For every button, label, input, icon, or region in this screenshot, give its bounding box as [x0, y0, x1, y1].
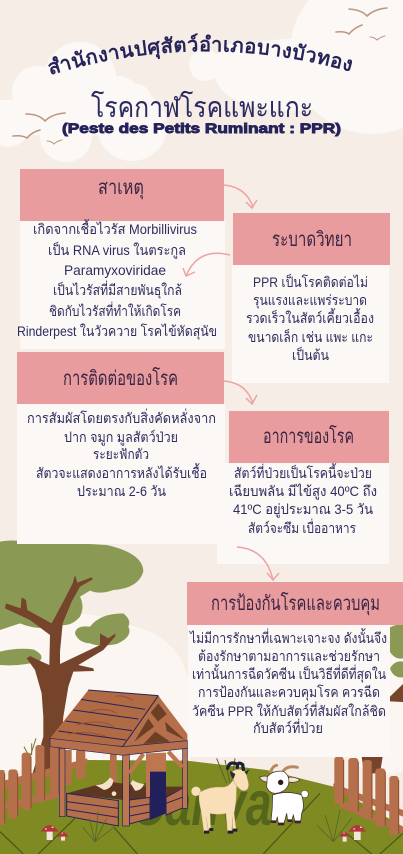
subtitle: (Peste des Petits Ruminant : PPR): [62, 120, 341, 136]
prevention text: ต้องรักษาตามอาการและช่วยรักษา: [198, 648, 380, 664]
prevention header: [187, 582, 403, 625]
white goat: horns: [271, 765, 297, 772]
symptoms body: [217, 463, 389, 564]
mushrooms: right: [339, 825, 366, 842]
tree: trunk and branches: [5, 575, 116, 777]
causes text: ชิดกับไวรัสที่ทำให้เกิดโรค: [49, 302, 181, 319]
tan goat: hooves: [204, 828, 237, 834]
epidemiology body: [232, 265, 389, 383]
panel: prevention and control: [187, 582, 403, 757]
epidemiology text: ขนาดเล็ก เช่น แพะ แกะ: [248, 328, 373, 345]
tuft behind goats: [217, 758, 235, 783]
symptoms text: 41ºC อยู่ประมาณ 3-5 วัน: [233, 501, 373, 518]
ground: [0, 760, 403, 854]
barn: rear fence pickets: [52, 748, 117, 795]
arrow: epidemiology to transmission: [183, 253, 230, 276]
prevention body: [188, 625, 390, 757]
birds: left: [13, 113, 65, 144]
cloud: upper right: [189, 0, 403, 134]
fence: left: [0, 738, 87, 825]
prevention text: การป้องกันและควบคุมโรค ควรฉีด: [198, 684, 380, 701]
panel: symptoms: [217, 411, 389, 564]
epidemiology header: [233, 213, 390, 265]
symptoms header: [229, 411, 389, 463]
cloud: upper left: [0, 42, 167, 162]
title: disease name: โรคกาฬโรคแพะแกะ: [91, 90, 313, 124]
transmission text: สัตวจะแสดงอาการหลังได้รับเชื้อ: [36, 463, 207, 481]
tan goat: horns: [228, 763, 243, 769]
barn: posts: [59, 748, 187, 826]
epidemiology text: [246, 273, 374, 363]
barn: gable panels: [134, 703, 185, 744]
barn: gable: [123, 696, 187, 747]
barn: eave beam: [50, 738, 187, 755]
barn: roof: [50, 690, 158, 747]
transmission text: ประมาณ 2-6 วัน: [77, 483, 166, 499]
white goat: hooves: [271, 819, 301, 825]
symptoms text: สัตว์จะซึม เบื่ออาหาร: [248, 519, 356, 536]
tan goat: ears: [230, 769, 249, 779]
transmission text: ระยะฟักตัว: [93, 446, 149, 462]
white goat: ears: [259, 776, 300, 782]
panel: epidemiology: [232, 213, 390, 383]
barn: roof wood grain: [68, 696, 133, 737]
panel: causes: [17, 169, 225, 349]
barn: roof plank lines: [50, 690, 158, 747]
arrow: causes to epidemiology: [224, 185, 257, 208]
barn: diagonal braces: [129, 752, 183, 773]
white goat: [259, 765, 308, 825]
white goat: body and legs: [271, 792, 303, 824]
tree: background canopy: [0, 540, 403, 677]
epidemiology text: รวดเร็วในสัตว์เคี้ยวเอื้อง: [246, 308, 374, 326]
tan goat: tail: [191, 787, 201, 796]
causes body: [20, 221, 225, 349]
prevention text: [189, 628, 387, 736]
tree: right side trunk and branch: [362, 684, 403, 773]
fence: right: [333, 757, 403, 835]
grass tuft behind fence: [24, 738, 36, 755]
scene: farm illustration: [0, 540, 403, 854]
causes text: เป็นไวรัสที่มีสายพันธุใกล้: [53, 281, 182, 299]
barn: chickens: [95, 777, 144, 796]
white goat: head: [267, 771, 289, 793]
causes text: Paramyxoviridae: [64, 262, 166, 278]
transmission text: ปาก จมูก มูลสัตว์ป่วย: [64, 429, 178, 446]
barn: back wall and door surround: [146, 753, 166, 820]
grass tufts: [83, 810, 352, 842]
tan goat: [191, 763, 249, 834]
barn: floor: [67, 782, 183, 801]
white goat: eye: [278, 780, 283, 785]
barn: [50, 690, 187, 826]
white goat: tail: [301, 790, 308, 798]
barn: wall plank lines: [67, 797, 184, 817]
symptoms text: เฉียบพลัน มีไข้สูง 40ºC ถึง: [229, 483, 377, 500]
prevention text: กับสัตว์ที่ป่วย: [253, 719, 323, 736]
causes header: [20, 169, 224, 221]
panel: transmission: [17, 352, 225, 544]
barn: door: [150, 772, 166, 820]
causes text: Rinderpest ในวัวควาย โรคไข้หัดสุนัข: [17, 323, 217, 340]
cloud: lower background: [0, 612, 403, 775]
epidemiology text: รุนแรงและแพร่ระบาด: [253, 292, 367, 309]
causes text: เป็น RNA virus ในตระกูล: [48, 241, 186, 259]
epidemiology text: เป็นต้น: [292, 346, 329, 363]
tan goat: head: [231, 769, 249, 791]
transmission body: [17, 404, 225, 544]
transmission heading: การติดต่อของโรค: [63, 367, 178, 390]
watermark lettering: Canva: [132, 769, 272, 839]
transmission text: [27, 409, 216, 499]
symptoms text: สัตว์ที่ป่วยเป็นโรคนี้จะป่วย: [234, 463, 372, 481]
epidemiology text: PPR เป็นโรคติดต่อไม่: [253, 273, 368, 290]
birds: upper right: [336, 8, 387, 40]
barn: front walls: [67, 787, 184, 826]
causes heading: สาเหตุ: [98, 177, 144, 200]
arrow: symptoms to prevention: [237, 547, 279, 580]
transmission text: การสัมผัสโดยตรงกับสิ่งคัดหลั่งจาก: [27, 409, 216, 426]
tan goat: body: [199, 781, 237, 832]
epidemiology heading: ระบาดวิทยา: [272, 229, 352, 251]
symptoms heading: อาการของโรค: [263, 425, 354, 448]
mushrooms: left: [41, 825, 69, 841]
causes text: [17, 219, 217, 340]
title: office name on arc: สำนักงานปศุสัตว์อำเภอบางบัวทอง: [48, 33, 352, 74]
transmission header: [17, 352, 224, 404]
ground lattice lines: [0, 793, 403, 854]
symptoms text: [229, 463, 377, 536]
causes text: เกิดจากเชื้อไวรัส Morbillivirus: [33, 219, 197, 237]
arrow: transmission to symptoms: [224, 381, 257, 404]
